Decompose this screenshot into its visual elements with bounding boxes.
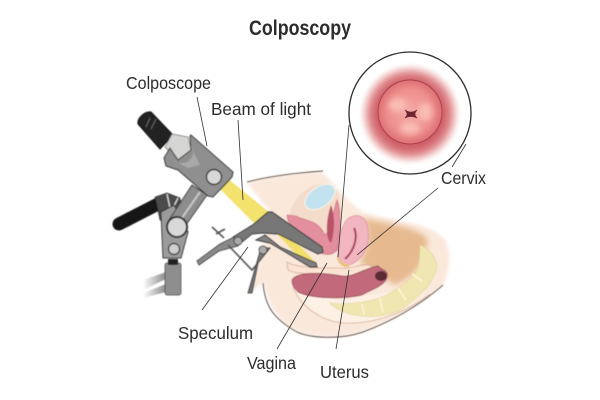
spine (330, 245, 437, 317)
label: Cervix: Cervix (441, 168, 486, 188)
label: Uterus: Uterus (320, 362, 369, 382)
tissue: pelvic cavity (360, 218, 428, 285)
rectum (292, 266, 387, 298)
post (165, 263, 181, 295)
beam of light (219, 178, 270, 224)
lower handle (248, 248, 270, 293)
lower knob (168, 244, 180, 254)
head (164, 135, 233, 197)
eyepiece collar (165, 134, 191, 160)
anatomy cross-section (247, 171, 449, 337)
leader lines (197, 97, 466, 349)
lower body: pale band (293, 287, 425, 323)
body: skin (247, 172, 449, 337)
body outline (263, 283, 443, 337)
upper blade (233, 212, 323, 254)
ratchet (212, 227, 258, 270)
cervical opening (405, 110, 417, 118)
eyepiece (138, 112, 173, 149)
inner beam (275, 232, 317, 264)
uterus (337, 216, 368, 267)
rectum wall (287, 262, 372, 276)
magnified view of cervix (349, 52, 471, 174)
head knob (206, 170, 222, 184)
speculum (197, 212, 323, 293)
bladder (287, 179, 341, 255)
title: Colposcopy (249, 17, 351, 40)
label: Beam of light: Beam of light (211, 99, 311, 119)
label: Vagina: Vagina (247, 353, 296, 373)
upper handle (197, 237, 238, 265)
label: Colposcope: Colposcope (126, 73, 211, 93)
colposcope (119, 112, 233, 298)
bracket (161, 205, 188, 258)
handle (119, 204, 158, 224)
handle fan (155, 193, 182, 225)
label: Speculum: Speculum (178, 323, 253, 343)
lower blade (256, 235, 317, 267)
stand bars (143, 272, 166, 298)
arm (167, 185, 207, 232)
joint (167, 217, 187, 237)
